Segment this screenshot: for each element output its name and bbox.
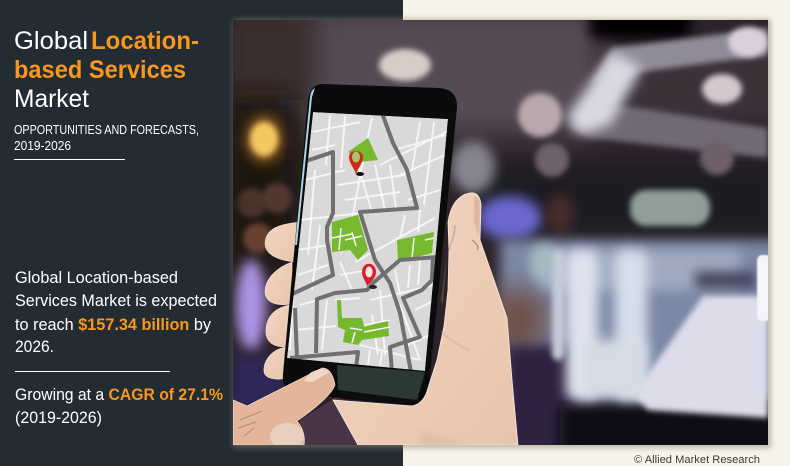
subheading: opportunities and forecasts: 2019-2026 bbox=[14, 139, 71, 153]
map route lines bbox=[290, 113, 438, 372]
photo shadow bbox=[233, 19, 771, 448]
text block: CAGR: Growing at a CAGR of 27.1% bbox=[15, 386, 223, 404]
left hand fingers behind phone bbox=[264, 222, 300, 379]
copyright note: © Allied Market Research bbox=[634, 454, 760, 466]
heading: report title: Location- bbox=[91, 27, 199, 55]
text block: market forecast: to reach $157.34 billion by bbox=[15, 316, 212, 334]
phone body bbox=[283, 84, 457, 405]
index finger bbox=[233, 368, 335, 449]
text block: CAGR bbox=[15, 386, 223, 427]
heading: report title: Market bbox=[14, 85, 89, 113]
phone screen: map bbox=[287, 112, 450, 372]
background: dark left panel bbox=[0, 0, 403, 466]
map pin: lower bbox=[362, 264, 377, 289]
text block: market forecast: Services Market is expected bbox=[15, 292, 217, 310]
heading: report title: based Services bbox=[14, 56, 186, 84]
blurred lights, lower area bbox=[500, 240, 780, 400]
text block: market forecast: Global Location-based bbox=[15, 269, 178, 287]
subheading: opportunities and forecasts bbox=[14, 123, 199, 153]
background: cream right panel bbox=[403, 0, 790, 466]
photo: hand holding phone with map bbox=[220, 10, 780, 455]
heading: report title: Global bbox=[14, 27, 88, 55]
text block: market forecast bbox=[15, 269, 217, 356]
blurred lights, upper area bbox=[379, 49, 431, 81]
text block: market forecast: 2026. bbox=[15, 338, 54, 356]
map streets bbox=[290, 115, 450, 366]
heading: report title bbox=[14, 27, 199, 113]
subheading: opportunities and forecasts: OPPORTUNITIES AND FORECASTS, bbox=[14, 123, 199, 137]
blurred background bbox=[220, 10, 780, 455]
text block: CAGR: (2019-2026) bbox=[15, 409, 102, 427]
map green areas bbox=[332, 138, 434, 345]
rule between text blocks bbox=[15, 371, 170, 372]
right hand and thumb bbox=[333, 193, 518, 445]
map pin: upper bbox=[349, 151, 364, 176]
rule under subheading bbox=[14, 159, 125, 160]
